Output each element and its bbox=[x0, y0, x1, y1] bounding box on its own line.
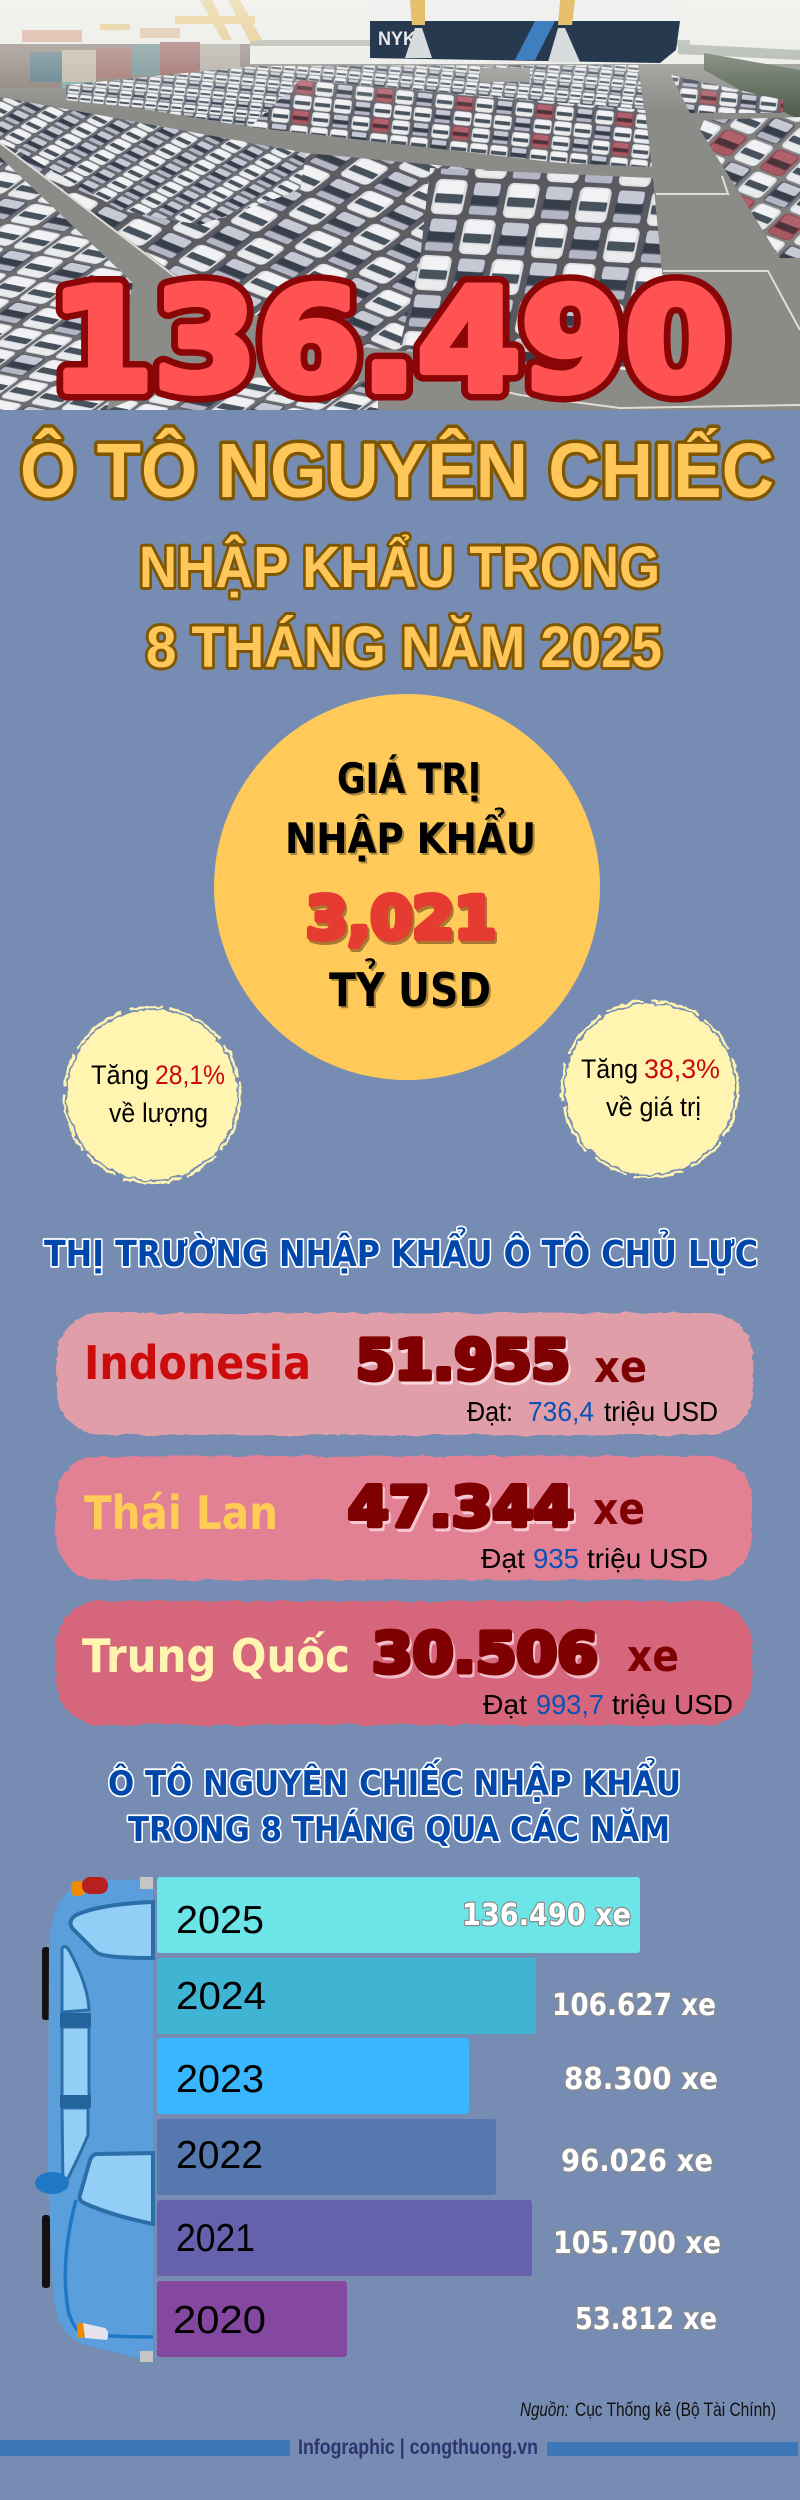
value line bbox=[483, 1689, 733, 1720]
right blocks bbox=[671, 75, 783, 113]
painted lines bbox=[0, 143, 800, 408]
value line bbox=[481, 1543, 708, 1574]
windshield bbox=[80, 2153, 153, 2224]
footer band bbox=[0, 2436, 798, 2459]
title line 2: NHẬP KHẨU TRONG bbox=[139, 535, 660, 600]
haze bbox=[0, 0, 800, 110]
heading: yearly comparison: TRONG 8 THÁNG QUA CÁC NĂM bbox=[128, 1809, 670, 1850]
number: 47.344 bbox=[348, 1475, 574, 1539]
bar 2023 bbox=[157, 2038, 718, 2114]
bar 2022: 96.026 xe bbox=[561, 2144, 713, 2179]
label: giá trị: GIÁ TRỊ bbox=[339, 755, 483, 805]
number: 47.344 bbox=[350, 1478, 576, 1542]
cranes bbox=[22, 0, 262, 42]
value line: 993,7 bbox=[536, 1689, 604, 1720]
callout: value growth: 38,3% bbox=[644, 1054, 720, 1084]
label: giá trị: GIÁ TRỊ bbox=[337, 753, 481, 803]
bar 2025: 2025 bbox=[176, 1899, 264, 1942]
rear window bbox=[70, 1902, 153, 1958]
bar 2022: 2022 bbox=[176, 2134, 263, 2177]
panel: Thái Lan bbox=[56, 1456, 752, 1580]
panel: Indonesia: xe bbox=[594, 1342, 647, 1393]
import value circle bbox=[214, 694, 600, 1080]
unit: tỷ usd: TỶ USD bbox=[329, 958, 491, 1017]
callout: volume growth: Tăng bbox=[91, 1060, 149, 1090]
number: 51.955 bbox=[356, 1328, 570, 1392]
title line 1: Ô TÔ NGUYÊN CHIẾC bbox=[20, 427, 774, 514]
value line: 736,4 bbox=[528, 1396, 594, 1427]
panel: Trung Quốc: xe bbox=[627, 1631, 679, 1682]
bar 2023: 2023 bbox=[176, 2058, 264, 2101]
value line: Đạt bbox=[481, 1543, 525, 1574]
bar 2024: 106.627 xe bbox=[552, 1988, 716, 2023]
value: 3,021: 3,021 bbox=[306, 884, 496, 952]
trees bbox=[704, 53, 800, 120]
title line 3: 8 THÁNG NĂM 2025 bbox=[146, 615, 662, 680]
number: 30.506 bbox=[374, 1624, 600, 1688]
body line bbox=[65, 2200, 153, 2337]
callout: volume growth: về lượng bbox=[109, 1098, 208, 1128]
headlight bbox=[77, 2323, 85, 2338]
side windows bbox=[62, 1947, 89, 2188]
source note: Nguồn: bbox=[520, 2400, 569, 2421]
lower-left block bbox=[0, 157, 133, 410]
unit: tỷ usd: TỶ USD bbox=[331, 960, 493, 1019]
label: nhập khẩu: NHẬP KHẨU bbox=[285, 806, 536, 863]
bar 2022 bbox=[157, 2119, 713, 2195]
panel: Trung Quốc: Trung Quốc bbox=[82, 1629, 350, 1683]
value line: triệu USD bbox=[587, 1543, 708, 1574]
ship: NYK bbox=[378, 29, 416, 50]
bar 2023: 88.300 xe bbox=[564, 2062, 718, 2097]
bar 2025 bbox=[157, 1877, 640, 1953]
bar 2020: 53.812 xe bbox=[575, 2302, 717, 2337]
rear lights bbox=[71, 1881, 85, 1896]
panel: Indonesia: Indonesia bbox=[84, 1336, 311, 1390]
panel: Indonesia bbox=[57, 1313, 753, 1435]
panel: Thái Lan: xe bbox=[593, 1484, 645, 1535]
bar 2021 bbox=[157, 2200, 721, 2276]
value line: Đạt bbox=[483, 1689, 527, 1720]
heading: yearly comparison bbox=[108, 1758, 681, 1850]
containers bbox=[0, 42, 252, 88]
value line: 935 bbox=[533, 1543, 579, 1574]
callout: volume growth: 28,1% bbox=[155, 1060, 225, 1090]
value: 3,021: 3,021 bbox=[308, 887, 498, 955]
panel: Thái Lan: Thái Lan bbox=[84, 1486, 278, 1540]
ship bbox=[370, 0, 681, 63]
bar 2020 bbox=[157, 2281, 717, 2357]
callout: value growth: Tăng bbox=[581, 1054, 638, 1084]
bar 2020: 2020 bbox=[173, 2299, 266, 2342]
callout: value growth bbox=[562, 1001, 738, 1177]
panel: Trung Quốc bbox=[56, 1601, 752, 1725]
icon: car seen from above bbox=[35, 1877, 153, 2362]
mirror bbox=[35, 2172, 69, 2194]
number: 30.506 bbox=[372, 1621, 598, 1685]
label: nhập khẩu: NHẬP KHẨU bbox=[287, 808, 538, 865]
number: 51.955 bbox=[358, 1331, 572, 1395]
value line: triệu USD bbox=[604, 1396, 718, 1427]
hero photo: cars parked at the port bbox=[0, 0, 800, 410]
big number: 136.490: 136.490 bbox=[50, 259, 728, 424]
callout: value growth: về giá trị bbox=[606, 1092, 701, 1122]
bar 2021: 2021 bbox=[176, 2217, 255, 2260]
footer band: Infographic | congthuong.vn bbox=[298, 2436, 538, 2459]
bar 2021: 105.700 xe bbox=[553, 2226, 721, 2261]
far block bbox=[66, 65, 652, 167]
bar chart: imports by year bbox=[157, 1877, 721, 2357]
heading: yearly comparison: Ô TÔ NGUYÊN CHIẾC NHẬP KHẨU bbox=[108, 1758, 681, 1804]
bar 2024 bbox=[157, 1958, 716, 2034]
bar 2024: 2024 bbox=[176, 1975, 266, 2018]
value line: triệu USD bbox=[612, 1689, 733, 1720]
callout: volume growth bbox=[64, 1007, 240, 1183]
big number: 136.490: 136.490 bbox=[50, 259, 728, 424]
bar 2025: 136.490 xe bbox=[462, 1898, 631, 1933]
value line: Đạt: bbox=[467, 1396, 513, 1427]
value line bbox=[467, 1396, 718, 1427]
near block bbox=[0, 97, 663, 372]
